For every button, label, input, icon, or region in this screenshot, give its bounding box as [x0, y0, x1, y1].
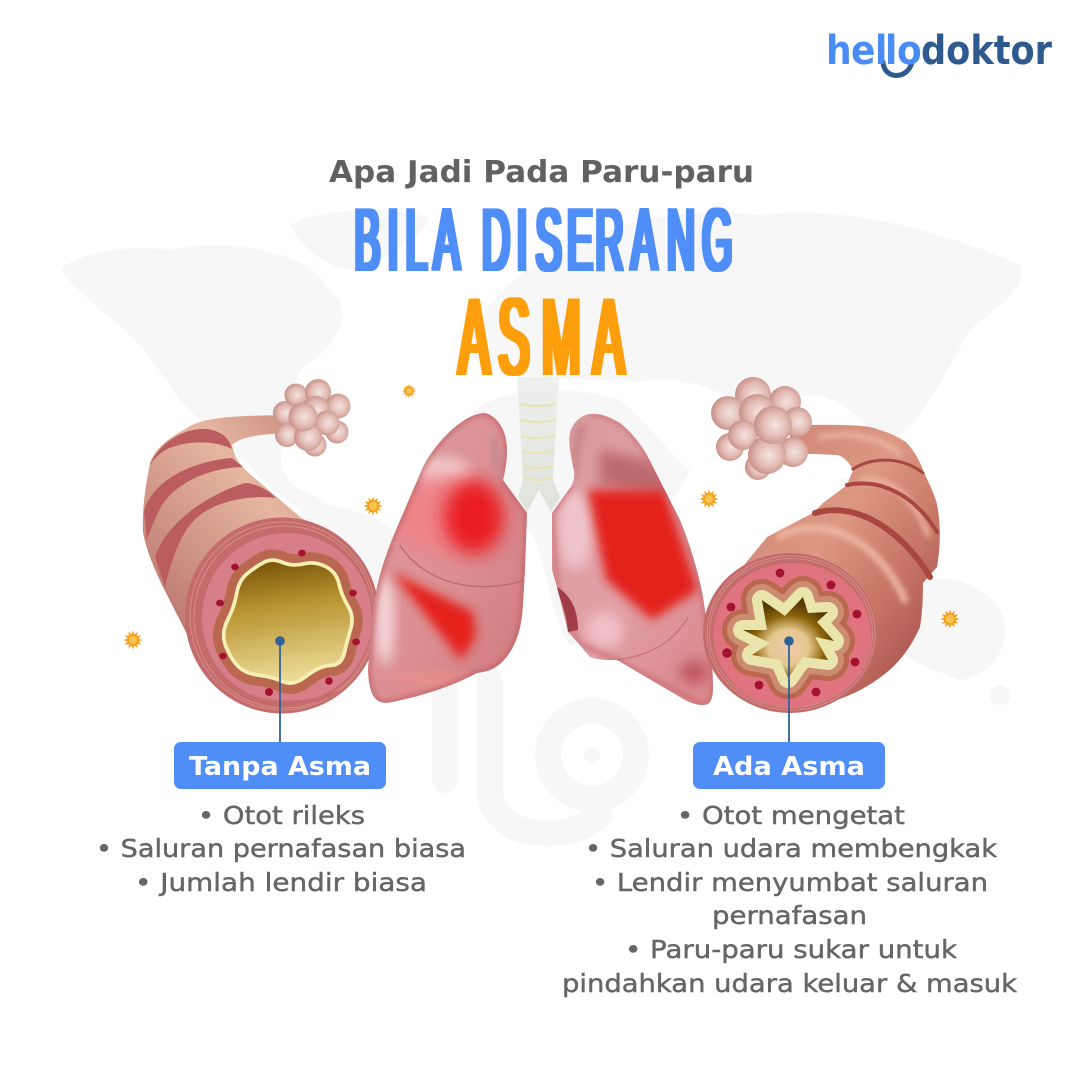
- text block: with asthma points: • Saluran udara membengkak: [585, 834, 998, 863]
- airway opening right: [703, 553, 877, 713]
- label: Ada Asma: Ada Asma: [713, 752, 865, 782]
- title: BILA DISERANG: BILA DISERANG: [355, 191, 732, 289]
- airway tube body right: [740, 425, 940, 702]
- text block: without asthma points: • Jumlah lendir biasa: [135, 868, 427, 897]
- fold highlights right: [780, 435, 928, 600]
- airway rings left: [144, 429, 276, 587]
- alveoli cluster right: [711, 377, 812, 480]
- right lung with inflamed area: [552, 414, 713, 705]
- watermark: hello doktor stethoscope mark: [445, 680, 636, 834]
- blood vessels right: [722, 569, 861, 696]
- text block: without asthma points: [96, 801, 466, 897]
- pointer: Ada Asma: [784, 636, 794, 744]
- pointer: Tanpa Asma: [275, 636, 285, 744]
- blood vessels left: [216, 550, 360, 696]
- background world map: [60, 210, 1022, 705]
- alveoli cluster left: [273, 379, 350, 456]
- text block: with asthma points: • Lendir menyumbat saluran: [592, 868, 988, 897]
- illustration: constricted airway with asthma: [703, 377, 940, 713]
- illustration: normal airway without asthma: [143, 379, 379, 714]
- airway wall and open lumen: [224, 560, 352, 683]
- title: subtitle line: Apa Jadi Pada Paru-paru: [329, 155, 754, 190]
- text block: with asthma points: [562, 801, 1018, 998]
- infographic canvas: [100, 34, 1052, 998]
- trachea: [517, 377, 560, 512]
- logo: hellodoktor: doktor: [921, 28, 1052, 74]
- label: Tanpa Asma: [174, 742, 386, 789]
- airway folds right: [815, 460, 937, 577]
- illustration: lungs: [368, 377, 713, 705]
- logo: hellodoktor: hello: [826, 27, 922, 73]
- label: Ada Asma: [693, 742, 885, 789]
- text block: without asthma points: • Saluran pernafasan biasa: [96, 834, 466, 863]
- virus particles: [124, 384, 960, 650]
- folded airway wall and narrowed lumen: [743, 597, 834, 678]
- left lung with inflamed areas: [368, 413, 527, 703]
- label: Tanpa Asma: Tanpa Asma: [189, 752, 371, 782]
- text block: with asthma points: • Paru-paru sukar untuk: [625, 935, 958, 964]
- airway tube body left: [143, 415, 340, 640]
- logo: hellodoktor: [826, 27, 1052, 76]
- text block: with asthma points: • Otot mengetat: [677, 801, 905, 830]
- airway opening left: [185, 518, 379, 714]
- text block: with asthma points: pindahkan udara keluar & masuk: [562, 969, 1018, 998]
- text block: without asthma points: • Otot rileks: [198, 801, 365, 830]
- text block: with asthma points: pernafasan: [712, 901, 867, 930]
- title: ASMA: ASMA: [459, 275, 624, 398]
